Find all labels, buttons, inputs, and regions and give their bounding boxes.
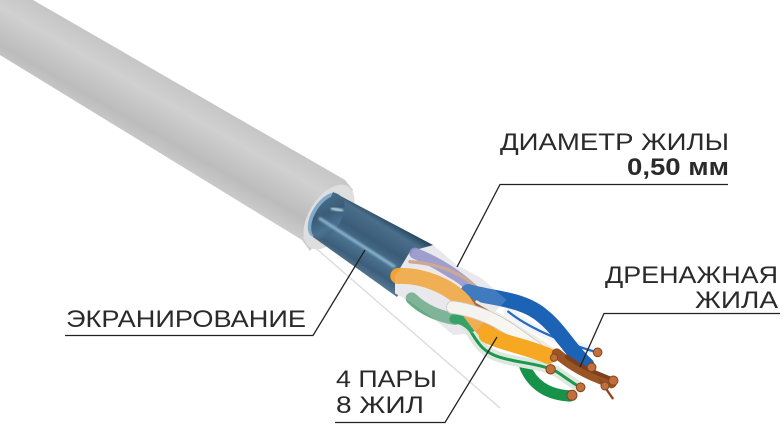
- clear film wrap: [395, 245, 507, 335]
- orange wire front: [487, 335, 548, 356]
- leader: core diameter: [457, 184, 728, 267]
- white-orange wire shadow: [453, 307, 537, 348]
- green-white wire: [463, 322, 580, 387]
- leader: drain wire: [580, 314, 780, 367]
- twisted wire pairs: [395, 245, 618, 400]
- label: drain wire: ЖИЛА: [695, 287, 779, 314]
- label: pairs and cores: 8 ЖИЛ: [336, 392, 424, 419]
- faded blue pair under film: [415, 253, 478, 295]
- label: core diameter: ДИАМЕТР ЖИЛЫ: [500, 129, 729, 156]
- green start: [454, 319, 472, 327]
- white-blue wire: [508, 312, 597, 352]
- orange wire base: [398, 276, 500, 340]
- copper conductor tips: [546, 348, 618, 400]
- brown conductors: [557, 353, 612, 383]
- brown striped wire: [470, 301, 550, 353]
- cable jacket: [0, 0, 365, 258]
- label: core diameter: [500, 129, 729, 181]
- white-orange wire: [453, 307, 537, 348]
- label: shielding: ЭКРАНИРОВАНИЕ: [66, 306, 306, 333]
- blue wire: [468, 292, 587, 365]
- leader: pairs: [335, 337, 497, 422]
- leader: shielding: [65, 250, 365, 336]
- faded white and brown strands: [410, 262, 473, 285]
- solid green wire: [525, 367, 570, 396]
- faded green pair under film: [412, 298, 455, 319]
- label: pairs and cores: [336, 366, 437, 419]
- label: drain wire: ДРЕНАЖНАЯ: [605, 262, 778, 289]
- drain wire strand: [303, 237, 500, 408]
- label: pairs and cores: 4 ПАРЫ: [336, 366, 437, 393]
- film inner base: [395, 245, 507, 335]
- label: core diameter: 0,50 мм: [627, 154, 729, 181]
- label: drain wire: [605, 262, 779, 314]
- foil shield: [301, 187, 433, 297]
